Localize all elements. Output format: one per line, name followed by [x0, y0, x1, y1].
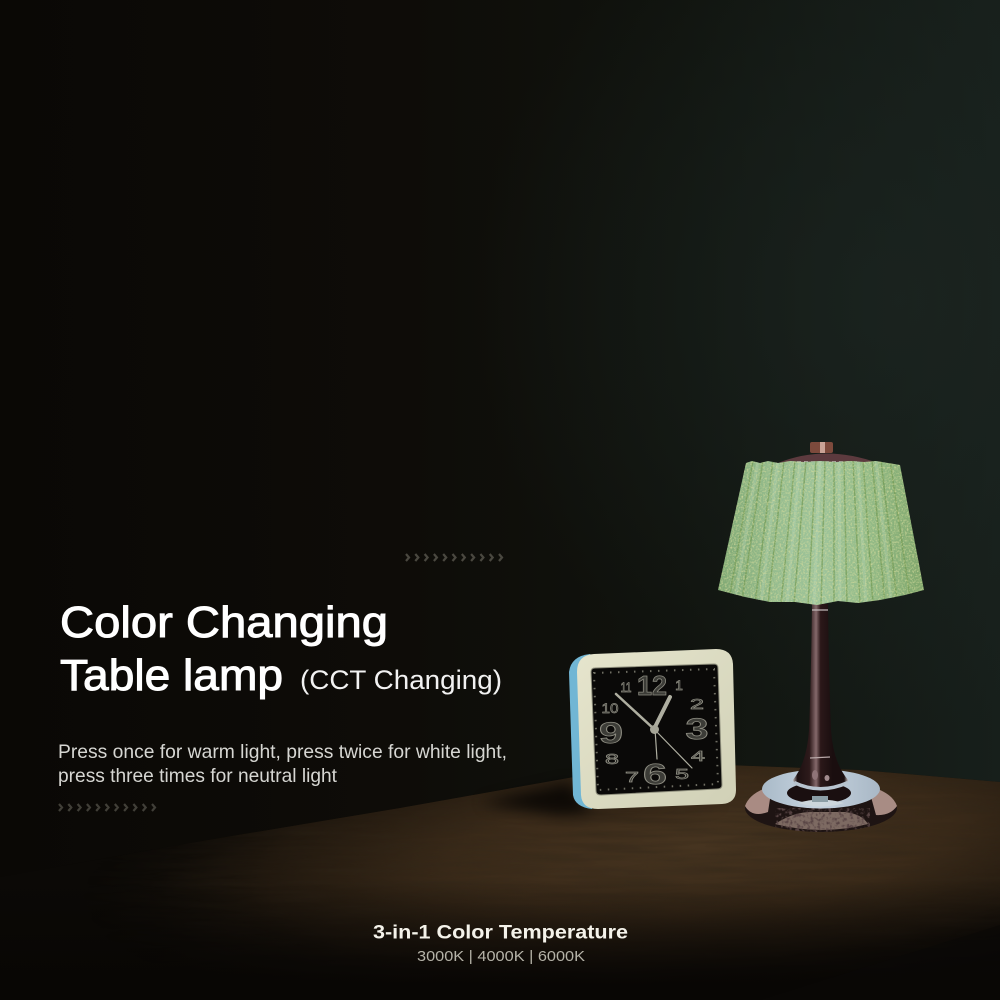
lamp top cap: [778, 442, 878, 463]
clock blue side: [569, 654, 600, 809]
decorative chevrons: bottom row: [59, 804, 155, 811]
clock numerals: 11: [620, 679, 632, 695]
clock numerals: 4: [691, 748, 705, 765]
decorative chevrons: top row: [406, 554, 502, 561]
alarm clock: [480, 649, 736, 816]
clock cream frame: [577, 649, 736, 809]
clock numerals: 3: [686, 713, 708, 746]
lamp stem: [793, 604, 848, 790]
footer heading: 3-in-1 Color Temperature: [373, 922, 628, 944]
clock minute ticks: [594, 669, 718, 790]
clock numerals: 7: [625, 769, 639, 786]
footer: colour temperature: [373, 922, 628, 965]
wooden table: [178, 766, 1000, 1000]
clock numerals: [599, 670, 708, 791]
description text: Press once for warm light, press twice for white light,: [58, 741, 507, 763]
description text: press three times for neutral light: [58, 765, 338, 787]
footer values: 3000K | 4000K | 6000K: [417, 948, 585, 965]
subtitle: CCT changing: (CCT Changing): [300, 665, 502, 695]
lamp base: [745, 770, 897, 832]
clock numerals: 6: [643, 759, 667, 791]
lamp green pleated shade: [715, 455, 927, 610]
clock numerals: 10: [602, 700, 619, 716]
clock black face: [591, 664, 722, 795]
clock shadow: [480, 782, 730, 816]
title: Table lamp: [60, 651, 283, 700]
clock numerals: 9: [599, 717, 623, 750]
clock numerals: 8: [605, 751, 619, 768]
table lamp: [715, 442, 927, 832]
clock numerals: 12: [637, 670, 667, 701]
clock numerals: 2: [690, 696, 704, 713]
description text: [58, 741, 507, 787]
clock numerals: 1: [675, 677, 683, 693]
title: [60, 598, 388, 700]
clock numerals: 5: [675, 766, 689, 783]
title: Color Changing: [60, 598, 388, 647]
lamp upper disc: [762, 770, 880, 808]
clock hands: [616, 694, 692, 768]
